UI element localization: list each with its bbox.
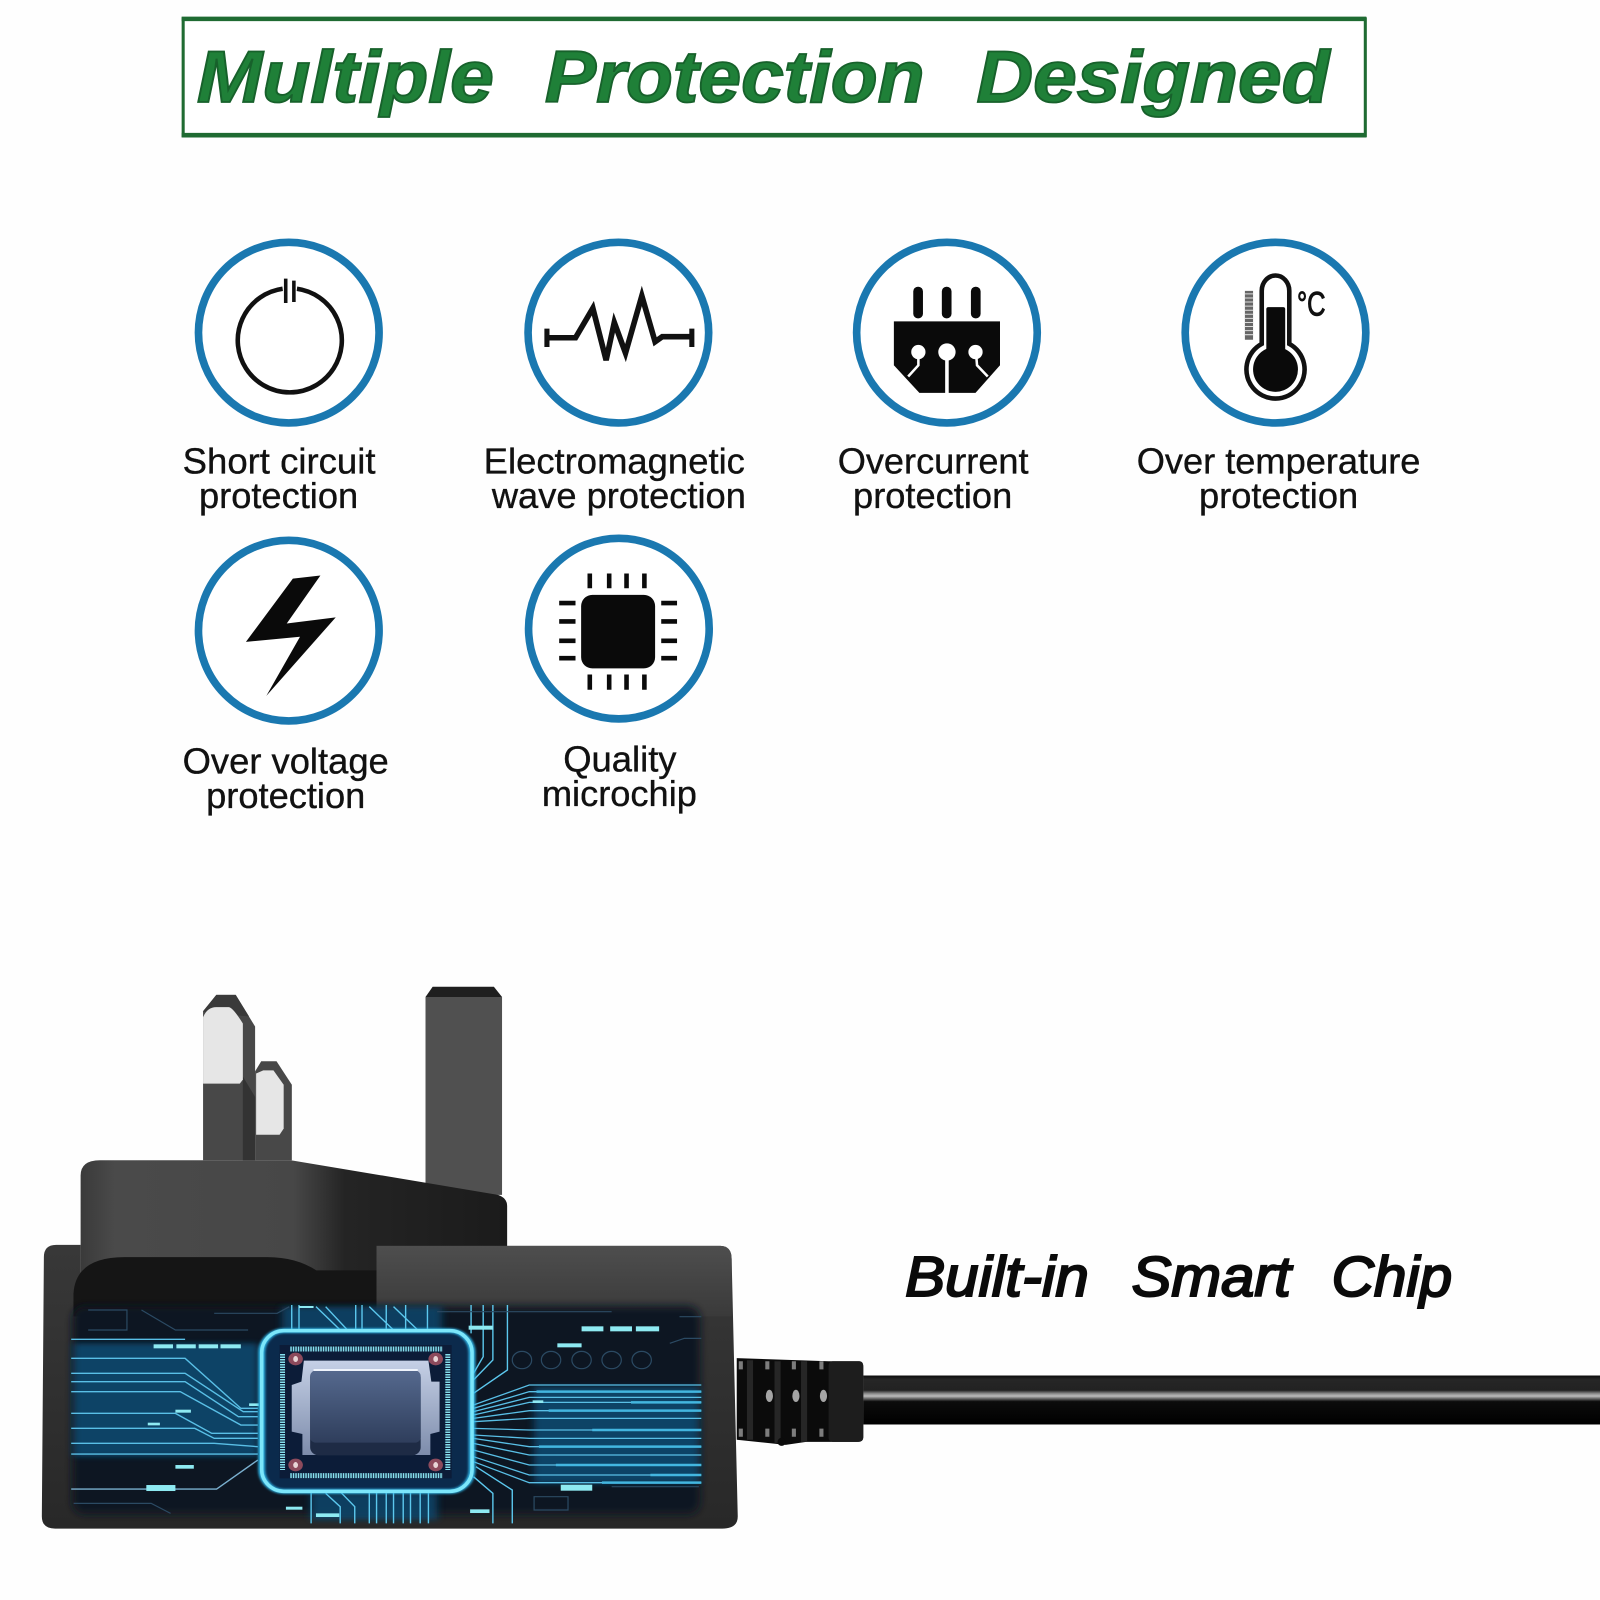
- right traces: [473, 1385, 701, 1483]
- label: over voltage: protection: [206, 775, 365, 816]
- label: electromagnetic: Electromagnetic: [484, 440, 745, 481]
- icon: thermometer: °C: [1297, 285, 1326, 323]
- panel: over voltage protection: [183, 540, 389, 816]
- caption: built-in smart chip: [905, 1245, 1452, 1308]
- vertical traces: [292, 1305, 512, 1523]
- label: quality microchip: microchip: [542, 773, 697, 814]
- panel: overcurrent protection: [838, 242, 1037, 516]
- label: over voltage: Over voltage: [183, 740, 389, 781]
- glow: [74, 1307, 699, 1520]
- circuit panel with chip: [71, 1305, 701, 1523]
- plug upper housing: [81, 1160, 507, 1316]
- pin: left large: [203, 995, 255, 1160]
- heat spreader: [292, 1361, 440, 1455]
- panel: electromagnetic wave protection: [484, 242, 746, 516]
- bright right traces: [537, 1392, 701, 1483]
- title banner: Protection: [545, 35, 924, 118]
- label: overcurrent: [838, 440, 1029, 516]
- processor die: [310, 1369, 421, 1455]
- title banner: Designed: [977, 35, 1332, 118]
- front block: [377, 1246, 732, 1316]
- label: over voltage: [183, 740, 389, 816]
- label: electromagnetic: wave protection: [491, 475, 746, 516]
- panel: over temperature protection: [1137, 242, 1420, 516]
- label: electromagnetic: [484, 440, 746, 516]
- label: short circuit: protection: [199, 475, 358, 516]
- icon: lightning bolt: [198, 540, 379, 721]
- dark recess: [73, 1257, 377, 1316]
- icon: power button: [198, 242, 379, 423]
- cable: [863, 1376, 1600, 1424]
- panel background: [72, 1306, 700, 1514]
- strain relief: [737, 1358, 863, 1446]
- adapter body: [42, 1160, 738, 1529]
- label: quality microchip: Quality: [563, 738, 677, 779]
- pin: small: [255, 1061, 292, 1160]
- plug pins: [203, 987, 502, 1195]
- label: short circuit: [183, 440, 376, 516]
- chip glow frame: [262, 1331, 472, 1491]
- caption: built-in smart chip: Smart: [1132, 1245, 1293, 1308]
- faint details: [74, 1307, 701, 1513]
- label: short circuit: Short circuit: [183, 440, 376, 481]
- lower housing: [42, 1245, 738, 1529]
- panel: quality microchip: [529, 538, 709, 814]
- icon: thermometer: [1185, 242, 1366, 423]
- label: overcurrent: protection: [853, 475, 1012, 516]
- chip screws: [291, 1354, 441, 1470]
- icon: wave: [528, 242, 709, 423]
- panel: short circuit protection: [183, 242, 379, 516]
- icon: circuit plug: [857, 242, 1037, 423]
- title banner: Multiple: [197, 35, 494, 118]
- left traces: [71, 1339, 258, 1489]
- caption: built-in smart chip: Built-in: [905, 1245, 1089, 1308]
- teal dashes: [146, 1306, 659, 1517]
- caption: built-in smart chip: Chip: [1332, 1245, 1452, 1308]
- label: over temperature: Over temperature: [1137, 440, 1420, 481]
- title banner: [182, 19, 1366, 136]
- pin: large earth blade: [426, 987, 502, 1195]
- label: over temperature: [1137, 440, 1420, 516]
- label: quality microchip: [542, 738, 697, 814]
- chip board: [280, 1345, 452, 1478]
- label: over temperature: protection: [1199, 475, 1358, 516]
- icon: microchip: [529, 538, 709, 719]
- label: overcurrent: Overcurrent: [838, 440, 1029, 481]
